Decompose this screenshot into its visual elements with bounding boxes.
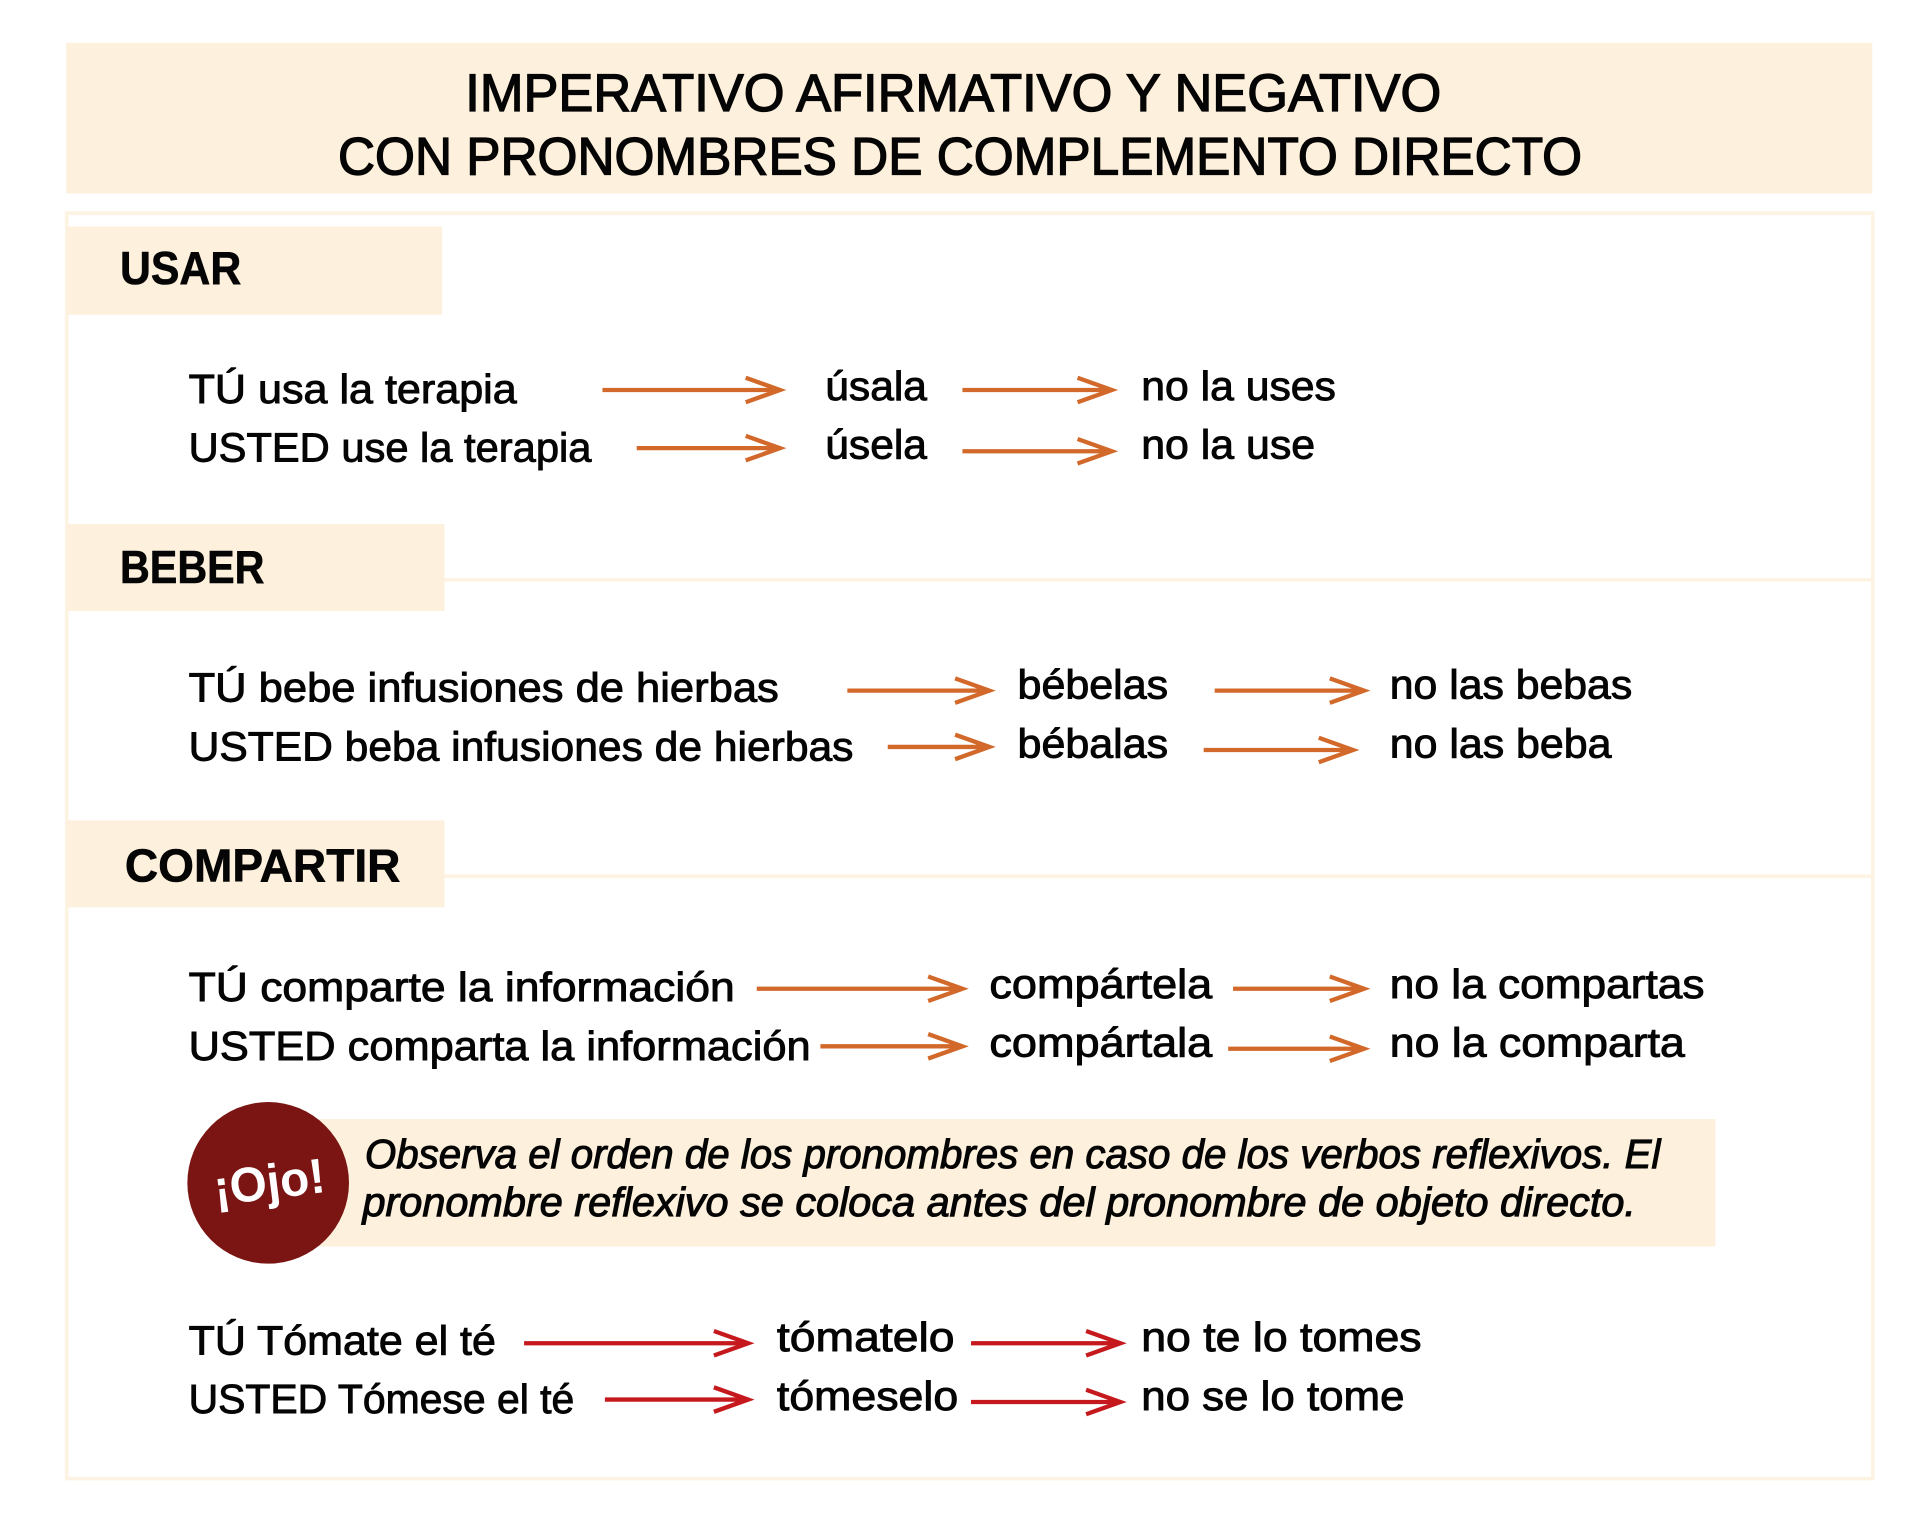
row: USTED use la terapia: no la use: [1141, 422, 1315, 468]
heading: BEBER: [67, 524, 444, 611]
row: TÚ comparte la información: TÚ comparte la información: [189, 964, 735, 1010]
row: TÚ Tómate el té: [189, 1314, 1422, 1363]
row: USTED Tómese el té: tómeselo: [777, 1373, 958, 1419]
row: USTED comparta la información: no la comparta: [1390, 1020, 1685, 1066]
row: TÚ usa la terapia: úsala: [825, 363, 928, 409]
row: TÚ comparte la información: compártela: [989, 961, 1213, 1007]
callout text: [268, 1119, 1715, 1247]
panel: USAR: [67, 227, 1336, 471]
row: TÚ comparte la información: no la compartas: [1390, 961, 1704, 1007]
heading: COMPARTIR: [67, 820, 444, 907]
row: USTED use la terapia: úsela: [825, 422, 928, 468]
callout text: pronombre reflexivo se coloca antes del pronombre de objeto directo.: [361, 1179, 1636, 1225]
row: USTED use la terapia: [189, 422, 1315, 471]
heading: USAR: USAR: [120, 242, 241, 294]
title: CON PRONOMBRES DE COMPLEMENTO DIRECTO: [338, 127, 1582, 186]
title: [66, 43, 1872, 193]
row: USTED beba infusiones de hierbas: bébalas: [1018, 720, 1168, 766]
icon: Ojo badge: [187, 1102, 349, 1264]
row: TÚ usa la terapia: no la uses: [1141, 363, 1336, 409]
row: USTED beba infusiones de hierbas: USTED beba infusiones de hierbas: [189, 723, 853, 769]
row: TÚ bebe infusiones de hierbas: bébelas: [1018, 662, 1168, 708]
heading: BEBER: BEBER: [120, 541, 264, 593]
callout text: Observa el orden de los pronombres en caso de los verbos reflexivos. El: [365, 1131, 1661, 1177]
row: TÚ usa la terapia: [189, 363, 1336, 412]
row: USTED comparta la información: compártala: [989, 1020, 1213, 1066]
title: IMPERATIVO AFIRMATIVO Y NEGATIVO: [465, 64, 1441, 123]
heading: USAR: [67, 227, 442, 315]
row: TÚ Tómate el té: TÚ Tómate el té: [189, 1317, 496, 1363]
heading: COMPARTIR: COMPARTIR: [125, 840, 400, 892]
row: USTED beba infusiones de hierbas: no las beba: [1390, 720, 1612, 766]
row: TÚ comparte la información: [189, 961, 1704, 1010]
row: USTED Tómese el té: no se lo tome: [1141, 1373, 1404, 1419]
row: USTED beba infusiones de hierbas: [189, 720, 1612, 769]
row: USTED comparta la información: [189, 1020, 1685, 1069]
row: TÚ bebe infusiones de hierbas: [189, 662, 1632, 711]
row: USTED use la terapia: USTED use la terapia: [189, 425, 592, 471]
panel: reflexive examples: [189, 1314, 1422, 1422]
row: TÚ usa la terapia: TÚ usa la terapia: [189, 366, 517, 412]
panel: BEBER: [67, 524, 1632, 769]
panel: COMPARTIR: [67, 820, 1704, 1069]
row: USTED Tómese el té: [189, 1373, 1404, 1422]
row: USTED comparta la información: USTED comparta la información: [189, 1023, 811, 1069]
row: TÚ bebe infusiones de hierbas: no las bebas: [1390, 662, 1632, 708]
row: TÚ bebe infusiones de hierbas: TÚ bebe infusiones de hierbas: [189, 665, 779, 711]
row: TÚ Tómate el té: tómatelo: [777, 1314, 954, 1360]
icon: Ojo badge: ¡Ojo!: [211, 1149, 328, 1216]
callout: ¡Ojo!: [187, 1102, 1716, 1264]
row: TÚ Tómate el té: no te lo tomes: [1141, 1314, 1422, 1360]
row: USTED Tómese el té: USTED Tómese el té: [189, 1376, 574, 1422]
panel: content frame: [67, 213, 1873, 1479]
